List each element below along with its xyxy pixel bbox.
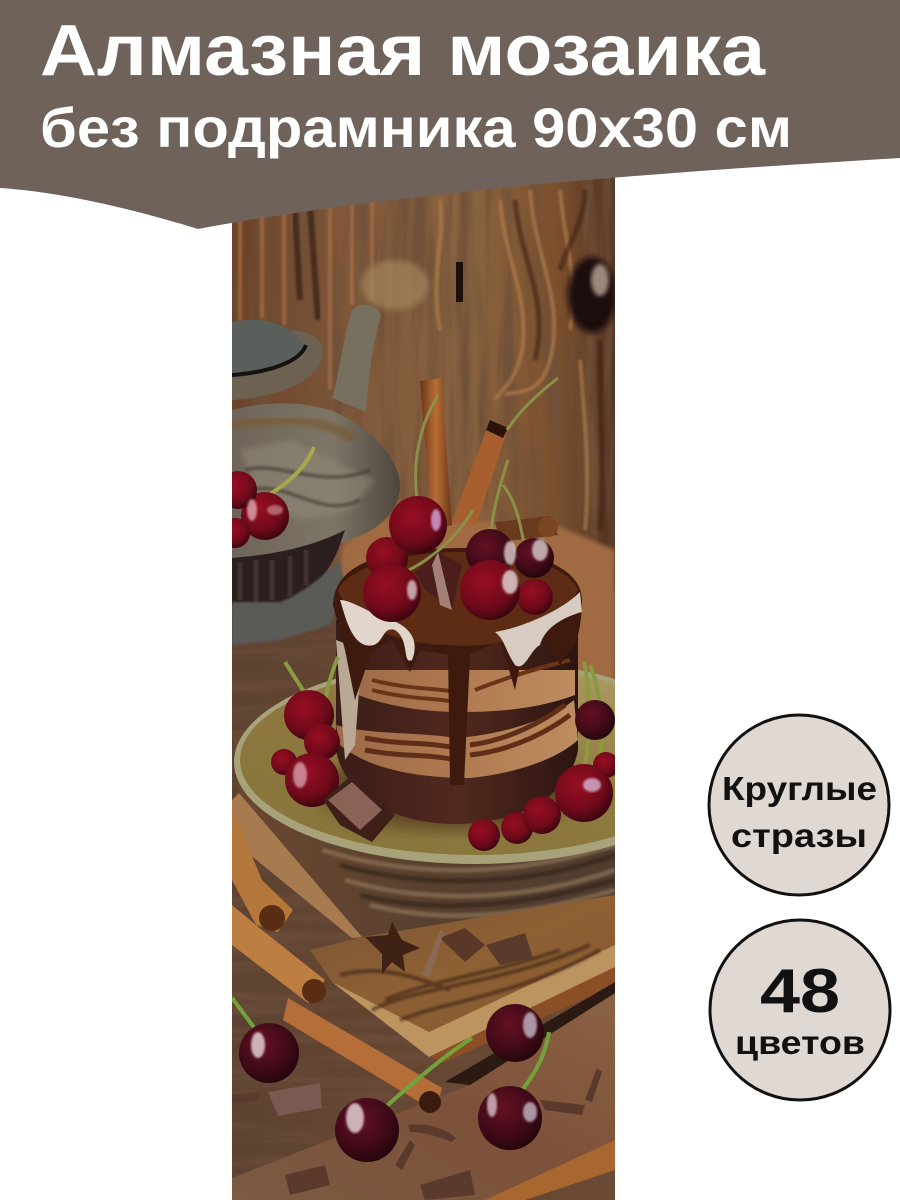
metal teapot: [232, 305, 400, 645]
wooden wall: [232, 170, 616, 590]
cinnamon sticks on the table: [232, 808, 442, 1113]
star anise and chocolate pieces on the board: [365, 922, 533, 977]
badge: round rhinestones: стразы: [731, 817, 867, 854]
product photo: chocolate cake with cherries: [232, 178, 615, 1200]
badge: 48 colours: 48: [760, 957, 840, 1026]
badge: round rhinestones: [709, 715, 889, 895]
lower board: [232, 982, 615, 1200]
cherries by the teapot: [232, 446, 316, 548]
title banner: [0, 0, 900, 229]
chocolate piece: [323, 775, 395, 842]
badge: 48 colours: цветов: [735, 1024, 865, 1061]
top cutting board under the plate: [232, 730, 615, 938]
badge: 48 colours: [710, 920, 890, 1100]
cherries on the table: [232, 998, 549, 1162]
layer cake: [333, 548, 582, 824]
cinnamon sticks on top: [420, 378, 558, 542]
middle board with spices: [310, 895, 615, 1062]
cherries on the cake: [363, 378, 558, 622]
title line 1: Алмазная мозаика: [40, 11, 766, 91]
cherries on the plate: [271, 657, 619, 851]
chocolate glaze with white drips: [333, 548, 582, 785]
title line 2: без подрамника 90х30 см: [40, 96, 792, 159]
badge: round rhinestones: Круглые: [722, 770, 877, 807]
table: [232, 590, 615, 1200]
chocolate crumbs: [232, 1068, 602, 1200]
cloth behind the cake: [340, 517, 615, 690]
plate: [234, 670, 615, 864]
